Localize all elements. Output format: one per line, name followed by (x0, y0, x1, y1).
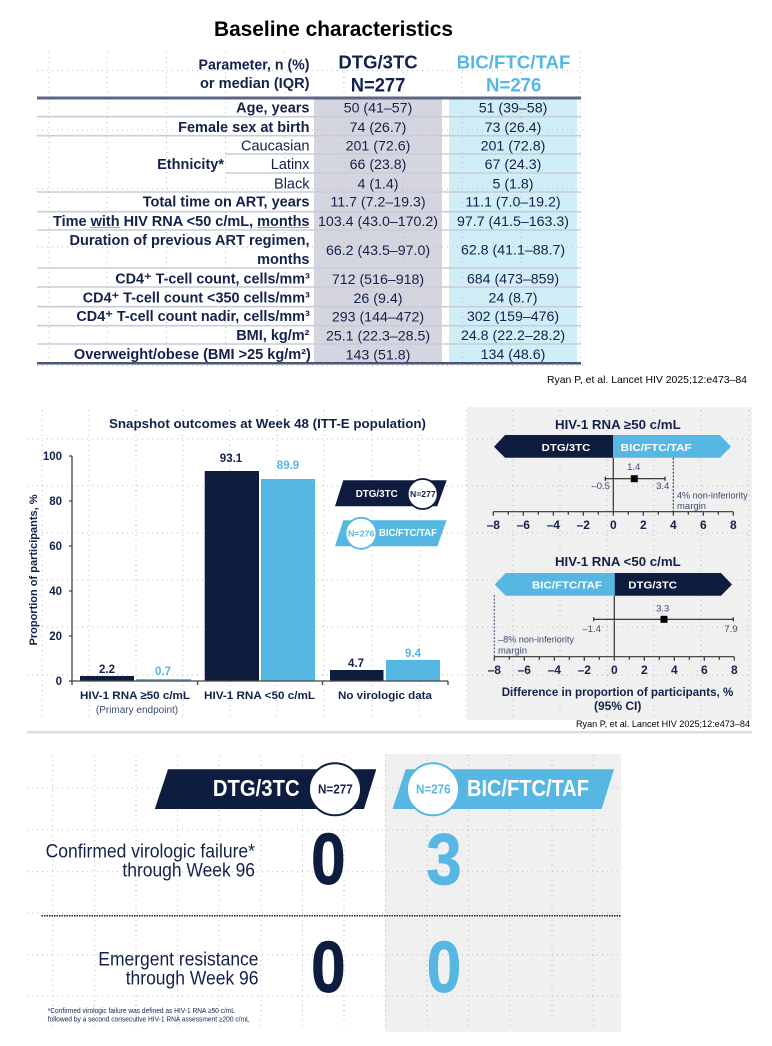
table header: DTG/3TC: N=277 (351, 76, 405, 97)
row label: confirmed virologic failure: Confirmed virologic failure* (46, 842, 256, 863)
axes (69, 456, 448, 685)
value: BIC/FTC/TAF confirmed virologic failure: 3 (426, 820, 462, 900)
x axis labels (80, 690, 433, 716)
row labels: BMI, kg/m² (236, 328, 310, 344)
axis labels: 0 (611, 663, 618, 677)
values: BIC/FTC/TAF: 73 (26.4) (485, 120, 541, 136)
axis labels: –2 (578, 663, 591, 677)
values: DTG/3TC: 25.1 (22.3–28.5) (326, 328, 430, 344)
banner: DTG/3TC: N=277 (318, 783, 353, 797)
table header: DTG/3TC: DTG/3TC (338, 51, 418, 72)
values: BIC/FTC/TAF: 62.8 (41.1–88.7) (461, 242, 565, 258)
forest plot: HIV-1 RNA <50 c/mL: DTG/3TC (628, 580, 677, 592)
plot title: HIV-1 RNA <50 c/mL (555, 555, 681, 569)
banner: BIC/FTC/TAF: BIC/FTC/TAF (467, 775, 589, 801)
non-inferiority margin line (672, 458, 674, 512)
bar value labels: 0.7 (155, 666, 171, 678)
bottom rule (37, 362, 581, 364)
y axis labels: 0 (56, 676, 62, 688)
row label: emergent resistance: through Week 96 (126, 968, 258, 989)
banner: DTG/3TC (155, 763, 376, 815)
values: DTG/3TC: 201 (72.6) (346, 138, 410, 154)
axis labels: 0 (610, 518, 617, 532)
axis title (502, 685, 734, 713)
table: baseline characteristics (37, 51, 586, 366)
axis labels: 8 (730, 518, 737, 532)
table header: parameter: Parameter, n (%) (198, 57, 310, 73)
row labels: Overweight/obese (BMI >25 kg/m²) (74, 347, 311, 363)
values: BIC/FTC/TAF: 5 (1.8) (492, 176, 534, 192)
row labels: Female sex at birth (178, 120, 310, 136)
legend: DTG/3TC: N=277 (410, 489, 436, 499)
axis title: (95% CI) (594, 699, 641, 713)
row labels: months (257, 252, 310, 268)
forest plot: HIV-1 RNA >=50 c/mL: DTG/3TC (542, 442, 591, 454)
x axis labels: HIV-1 RNA ≥50 c/mL (80, 690, 190, 702)
row labels: Latinx (271, 157, 310, 173)
table header: BIC/FTC/TAF: N=276 (486, 76, 541, 97)
section divider (27, 731, 752, 734)
values: BIC/FTC/TAF: 51 (39–58) (479, 101, 547, 117)
bar value labels: 89.9 (277, 460, 299, 472)
footnote: followed by a second consecutive HIV-1 RNA assessment ≥200 c/mL (48, 1014, 250, 1024)
interval labels: margin (498, 645, 527, 656)
values: BIC/FTC/TAF: 97.7 (41.5–163.3) (457, 214, 569, 230)
row labels: Age, years (236, 101, 310, 117)
axis labels: 4 (671, 663, 678, 677)
values: DTG/3TC: 143 (51.8) (346, 348, 410, 364)
row label: emergent resistance: Emergent resistance (98, 950, 258, 971)
values: BIC/FTC/TAF: 134 (48.6) (481, 347, 545, 363)
values: DTG/3TC: 66.2 (43.5–97.0) (326, 243, 430, 259)
y axis labels: 80 (49, 496, 62, 508)
forest plot: HIV-1 RNA <50 c/mL: BIC/FTC/TAF (532, 580, 603, 592)
footnote: *Confirmed virologic failure was defined as HIV-1 RNA ≥50 c/mL (48, 1006, 235, 1015)
citation: table: Ryan P, et al. Lancet HIV 2025;12:e473–84 (547, 374, 747, 386)
row label: emergent resistance (98, 950, 258, 989)
axis labels: 2 (641, 663, 648, 677)
panel: gray forest plot background (467, 407, 752, 720)
arrow: favours BIC/FTC/TAF (495, 573, 615, 596)
values: BIC/FTC/TAF (457, 101, 569, 363)
column fill: BIC/FTC/TAF (449, 98, 577, 363)
footnote (48, 1006, 250, 1024)
axis labels: 8 (731, 663, 738, 677)
axis labels (487, 518, 737, 532)
citation: snapshot and forest plots: Ryan P, et al. Lancet HIV 2025;12:e473–84 (576, 719, 750, 730)
panel: gray BIC/FTC/TAF column background (385, 754, 621, 1032)
x axis labels: No virologic data (338, 690, 433, 702)
axis labels: –8 (488, 663, 501, 677)
confidence interval (594, 617, 733, 621)
axis labels: –2 (577, 518, 590, 532)
arrow: favours DTG/3TC (615, 573, 732, 596)
values: DTG/3TC (318, 101, 438, 363)
table header: BIC/FTC/TAF (457, 51, 570, 97)
interval labels: 3.3 (656, 603, 669, 614)
banner: DTG/3TC: DTG/3TC (213, 775, 300, 801)
values: DTG/3TC: 74 (26.7) (350, 120, 406, 136)
confidence interval (605, 477, 665, 481)
x axis labels: (Primary endpoint) (96, 705, 178, 716)
non-inferiority margin line (493, 595, 495, 657)
chart: snapshot outcomes at week 48 (28, 417, 448, 716)
axis labels (488, 663, 738, 677)
heading: baseline characteristics: Baseline characteristics (214, 18, 453, 41)
banner: BIC/FTC/TAF: N=276 (416, 783, 451, 797)
header rule (37, 96, 581, 100)
axis labels: 2 (640, 518, 647, 532)
interval labels (591, 462, 748, 512)
axis labels: 6 (700, 518, 707, 532)
value: BIC/FTC/TAF emergent resistance: 0 (427, 928, 461, 1008)
row labels: Ethnicity* (157, 157, 224, 173)
legend: DTG/3TC: DTG/3TC (356, 489, 398, 500)
row labels: Duration of previous ART regimen, (70, 233, 310, 249)
interval labels: –1.4 (582, 624, 601, 635)
axis labels: –6 (517, 518, 530, 532)
interval labels: –0.5 (591, 481, 610, 492)
value: DTG/3TC emergent resistance: 0 (311, 928, 346, 1008)
bar value labels: 4.7 (348, 658, 364, 670)
y axis labels: 40 (49, 586, 62, 598)
forest plot: HIV-1 RNA <50 c/mL (488, 555, 738, 713)
bars (80, 471, 440, 681)
bar value labels: 2.2 (99, 664, 115, 676)
values: DTG/3TC: 66 (23.8) (350, 157, 406, 173)
legend: BIC/FTC/TAF (335, 518, 447, 549)
axis title: Difference in proportion of participants, % (502, 685, 734, 699)
row labels: CD4⁺ T-cell count <350 cells/mm³ (83, 290, 310, 306)
y axis labels: 100 (43, 451, 62, 463)
forest plot: HIV-1 RNA >=50 c/mL (487, 418, 748, 532)
row labels: Black (274, 176, 310, 192)
values: BIC/FTC/TAF: 24 (8.7) (489, 290, 537, 306)
axis labels: –6 (518, 663, 531, 677)
axis labels: 6 (701, 663, 708, 677)
legend: BIC/FTC/TAF: BIC/FTC/TAF (379, 528, 437, 539)
table header: BIC/FTC/TAF: BIC/FTC/TAF (457, 51, 570, 72)
axis labels: –4 (548, 663, 561, 677)
value: DTG/3TC confirmed virologic failure: 0 (311, 820, 346, 900)
legend: DTG/3TC (335, 479, 447, 509)
x axis labels: HIV-1 RNA <50 c/mL (204, 690, 315, 702)
interval labels: 4% non-inferiority (677, 490, 748, 501)
table header: parameter (198, 57, 310, 92)
arrow: favours BIC/FTC/TAF (613, 435, 731, 458)
axis (493, 458, 733, 516)
y axis labels (43, 451, 62, 688)
table header: DTG/3TC (338, 51, 418, 97)
arrow: favours DTG/3TC (494, 435, 613, 458)
row labels (53, 101, 311, 363)
values: BIC/FTC/TAF: 24.8 (22.2–28.2) (461, 328, 565, 344)
row label: confirmed virologic failure (46, 842, 256, 882)
interval labels (498, 603, 738, 656)
banner: BIC/FTC/TAF (392, 763, 614, 815)
row labels: CD4⁺ T-cell count, cells/mm³ (115, 271, 310, 287)
values: DTG/3TC: 26 (9.4) (354, 291, 402, 307)
values: DTG/3TC: 4 (1.4) (357, 176, 399, 192)
values: DTG/3TC: 50 (41–57) (344, 101, 412, 117)
interval labels: 7.9 (724, 624, 738, 635)
axis labels: –4 (547, 518, 560, 532)
y axis labels: 20 (49, 631, 62, 643)
interval labels: margin (677, 501, 706, 512)
values: BIC/FTC/TAF: 11.1 (7.0–19.2) (465, 195, 561, 211)
interval labels: 3.4 (656, 481, 669, 492)
values: BIC/FTC/TAF: 67 (24.3) (485, 157, 541, 173)
y axis title: Proportion of participants, % (28, 494, 40, 646)
axis labels: –8 (487, 518, 500, 532)
values: BIC/FTC/TAF: 302 (159–476) (467, 309, 559, 325)
values: BIC/FTC/TAF: 684 (473–859) (467, 272, 559, 288)
values: DTG/3TC: 11.7 (7.2–19.3) (330, 195, 426, 211)
row labels: Caucasian (241, 138, 310, 154)
bar value labels: 9.4 (405, 648, 422, 660)
plot title: HIV-1 RNA ≥50 c/mL (555, 418, 681, 432)
values: DTG/3TC: 103.4 (43.0–170.2) (318, 214, 438, 230)
values: BIC/FTC/TAF: 201 (72.8) (481, 138, 545, 154)
bar value labels: 93.1 (220, 453, 243, 465)
bar value labels (99, 453, 422, 678)
row labels: Total time on ART, years (143, 195, 310, 211)
values: DTG/3TC: 293 (144–472) (332, 310, 424, 326)
y axis labels: 60 (49, 541, 62, 553)
table header: parameter: or median (IQR) (200, 76, 310, 92)
interval labels: 1.4 (627, 462, 640, 473)
axis labels: 4 (670, 518, 677, 532)
values: DTG/3TC: 712 (516–918) (332, 272, 424, 288)
forest plot: HIV-1 RNA >=50 c/mL: BIC/FTC/TAF (621, 442, 692, 454)
row labels: CD4⁺ T-cell count nadir, cells/mm³ (76, 309, 310, 325)
axis (494, 596, 734, 661)
interval labels: –8% non-inferiority (498, 634, 574, 645)
chart title: Snapshot outcomes at Week 48 (ITT-E population) (109, 417, 426, 431)
legend: BIC/FTC/TAF: N=276 (348, 528, 375, 538)
row label: confirmed virologic failure: through Week 96 (122, 861, 255, 882)
row labels: Time with HIV RNA <50 c/mL, months (53, 214, 310, 230)
column fill: DTG/3TC (314, 98, 442, 363)
